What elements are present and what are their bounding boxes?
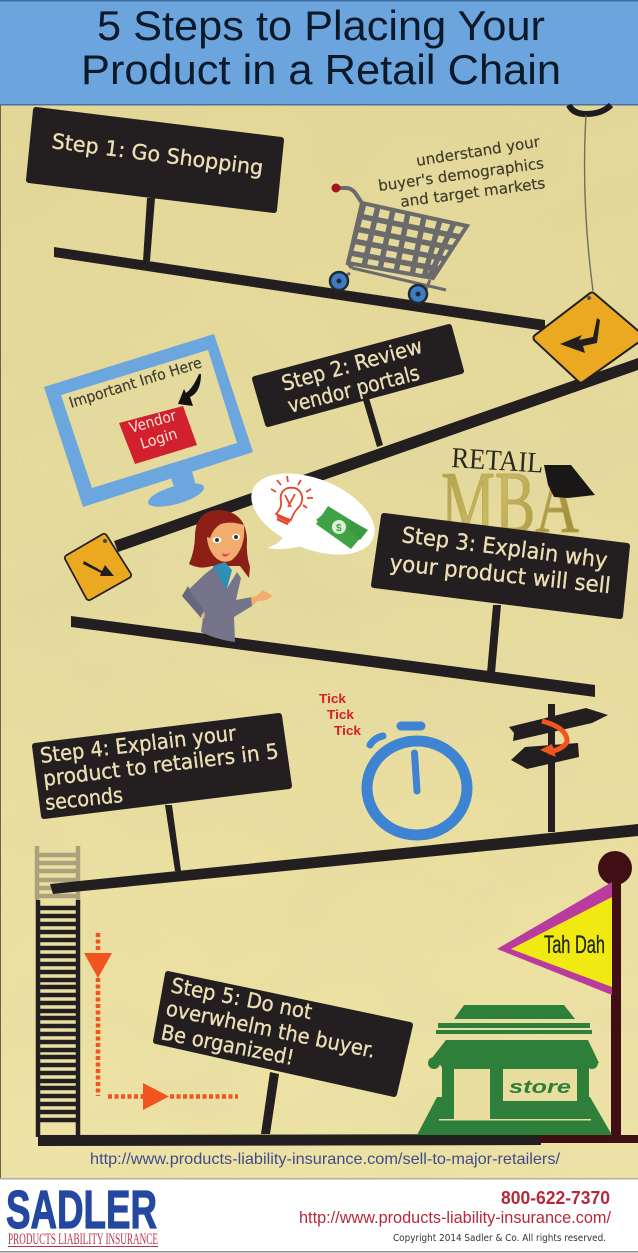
step 1 sign	[29, 110, 281, 210]
vendor login button: Login	[138, 425, 180, 453]
contact details: http://www.products-liability-insurance.com/	[299, 1208, 611, 1227]
shopping note	[377, 132, 546, 211]
contact details: 800-622-7370	[501, 1188, 610, 1208]
hanging rope and ring	[569, 105, 611, 291]
icon: curved arrow	[178, 374, 201, 406]
icon: diamond sign 1	[537, 296, 638, 379]
ladder upper section	[37, 846, 78, 900]
icon: stopwatch	[367, 726, 467, 835]
step 3 post	[487, 605, 501, 673]
step 4 sign	[35, 716, 289, 816]
icon: flag	[497, 851, 632, 1136]
shelf 3	[71, 616, 595, 697]
step 3 sign: your product will sell	[388, 551, 612, 599]
contact details	[299, 1188, 611, 1244]
tick labels: Tick	[319, 691, 347, 706]
icon: flag: Tah Dah	[544, 931, 605, 959]
vendor login button	[119, 406, 197, 464]
ladder lower section	[38, 900, 78, 1137]
step 2 sign: Step 2: Review	[279, 334, 425, 396]
source url: http://www.products-liability-insurance.com/sell-to-major-retailers/	[90, 1151, 561, 1168]
panel: step 4	[35, 691, 638, 1137]
shopping note: and target markets	[399, 174, 546, 211]
shelf 2	[114, 358, 638, 552]
step 2 sign	[255, 327, 461, 424]
logo: Sadler	[6, 1180, 158, 1248]
step 1 post	[143, 198, 155, 261]
vendor login button: Vendor	[127, 406, 179, 437]
title: 5 Steps to Placing Your	[97, 2, 545, 49]
monitor heading: Important Info Here	[67, 354, 204, 412]
shopping note: understand your	[415, 132, 542, 170]
step 5 sign: overwhelm the buyer.	[164, 996, 377, 1063]
footer	[0, 1178, 638, 1253]
step 2 post	[363, 398, 383, 447]
icon: money: $	[336, 523, 342, 534]
header banner	[0, 0, 638, 106]
contact details: Copyright 2014 Sadler & Co. All rights reserved.	[393, 1233, 606, 1244]
character: businesswoman	[182, 510, 272, 642]
icon: money	[316, 506, 368, 549]
icon: store: store	[509, 1077, 571, 1097]
retail MBA logo: MBA	[441, 455, 579, 552]
step 4 post	[165, 805, 181, 871]
icon: diamond sign 2	[68, 537, 128, 597]
step 4 sign: product to retailers in 5	[42, 739, 280, 791]
step 1 sign: Step 1: Go Shopping	[50, 129, 265, 180]
icon: signpost	[509, 704, 608, 832]
tick labels: Tick	[327, 707, 355, 722]
speech bubble	[240, 457, 386, 571]
panel: step 1	[29, 110, 546, 331]
shopping note: buyer's demographics	[377, 154, 545, 195]
step 5 post	[261, 1072, 279, 1134]
panel: step 2	[44, 296, 638, 597]
logo: Sadler: PRODUCTS LIABILITY INSURANCE	[8, 1231, 158, 1248]
step 5 sign	[156, 973, 410, 1094]
logo: Sadler: SADLER	[6, 1180, 157, 1240]
step 5 sign: Be organized!	[159, 1020, 296, 1070]
step 4 sign: Step 4: Explain your	[39, 721, 238, 768]
icon: monitor	[44, 334, 253, 512]
step 3 sign	[374, 516, 627, 616]
bottom shelf	[38, 1134, 541, 1146]
tick labels	[319, 691, 362, 738]
retail MBA logo: RETAIL	[451, 442, 544, 480]
panel: step 3	[71, 442, 627, 697]
title: Product in a Retail Chain	[81, 46, 561, 93]
flag pole base	[539, 1135, 638, 1143]
step 3 sign: Step 3: Explain why	[400, 523, 609, 574]
shelf 1	[54, 247, 545, 331]
step 2 sign: vendor portals	[285, 361, 422, 418]
title	[81, 2, 561, 93]
icon: shopping cart	[330, 184, 467, 303]
step 4 sign: seconds	[44, 783, 124, 815]
step 5 sign: Step 5: Do not	[169, 973, 314, 1024]
icon: store	[417, 1005, 612, 1135]
shelf 4	[50, 824, 638, 894]
tick labels: Tick	[334, 723, 362, 738]
dashed path arrow	[84, 933, 238, 1110]
panel: step 5	[38, 851, 638, 1168]
icon: light bulb	[271, 476, 313, 524]
